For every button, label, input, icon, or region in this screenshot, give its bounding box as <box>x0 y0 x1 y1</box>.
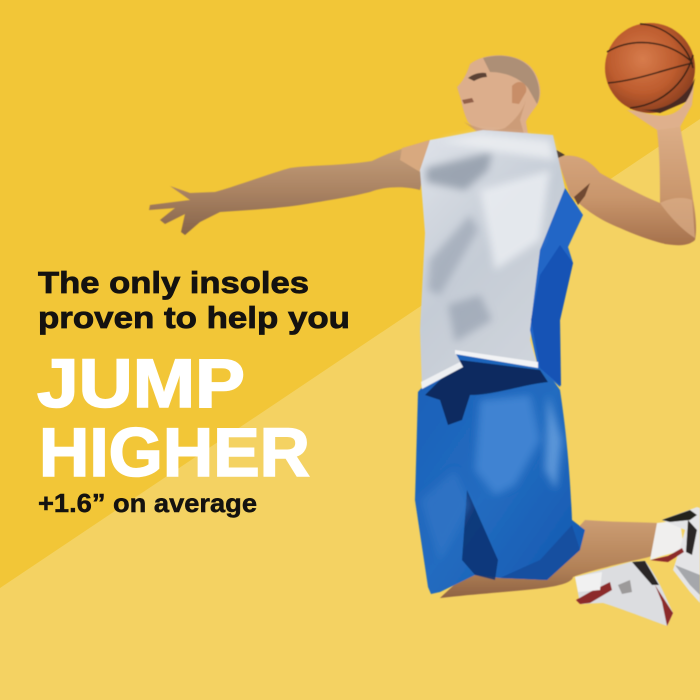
raised right arm <box>557 125 696 245</box>
head and neck <box>457 55 540 134</box>
athlete jumping with basketball <box>149 23 700 626</box>
basketball <box>605 23 695 113</box>
shorts <box>415 350 585 594</box>
heading: JUMP: JUMP <box>37 345 245 422</box>
text block: intro line 2: proven to help you <box>38 300 350 335</box>
heading: HIGHER: HIGHER <box>39 414 310 491</box>
front foot sock and shoe <box>650 507 700 603</box>
text block: intro line 1: The only insoles <box>38 265 309 300</box>
statistic: average gain: +1.6” on average <box>38 488 257 518</box>
outstretched left arm and hand <box>149 140 430 235</box>
back leg shoe <box>575 561 673 626</box>
jersey <box>420 130 583 389</box>
hand holding ball <box>627 85 694 130</box>
thigh and calf <box>440 520 663 598</box>
